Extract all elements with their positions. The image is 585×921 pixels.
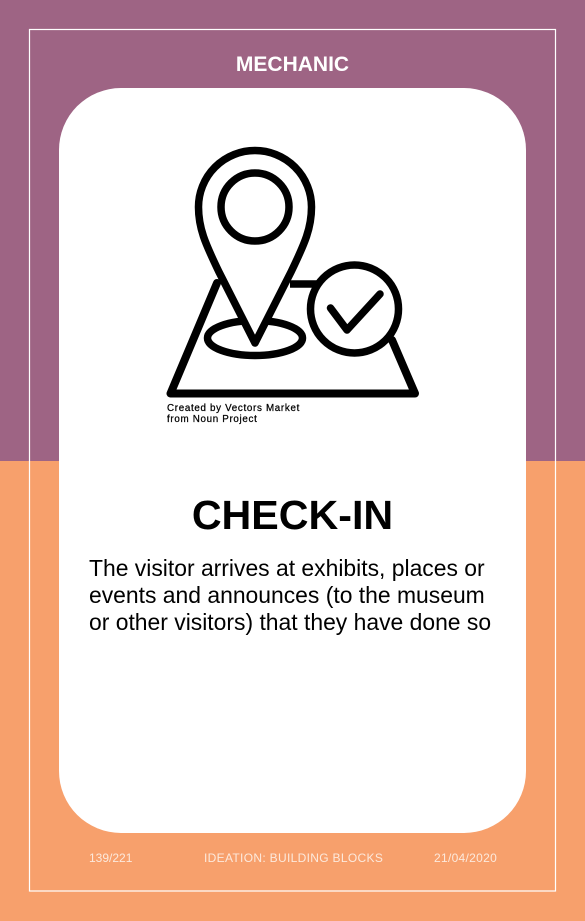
white card panel (59, 88, 526, 833)
check circle (310, 265, 398, 353)
category heading: MECHANIC (236, 53, 349, 76)
description: or other visitors) that they have done so (89, 609, 491, 635)
map outline (170, 283, 415, 394)
map top edge (290, 280, 317, 288)
check mark (330, 294, 380, 330)
pin (198, 151, 312, 343)
purple upper background (0, 0, 585, 461)
pin inner circle (221, 173, 289, 241)
title: CHECK-IN (192, 492, 393, 538)
footer: card number: 139/221 (89, 851, 133, 865)
footer: date: 21/04/2020 (434, 851, 497, 865)
icon attribution: Created by Vectors Market (167, 403, 300, 414)
ellipse (208, 320, 302, 356)
description: The visitor arrives at exhibits, places or (89, 555, 485, 581)
description: events and announces (to the museum (89, 582, 485, 608)
icon: map pin with check mark (170, 151, 415, 394)
footer: deck name: IDEATION: BUILDING BLOCKS (204, 851, 383, 865)
orange lower background (0, 461, 585, 921)
icon attribution: from Noun Project (167, 414, 258, 425)
